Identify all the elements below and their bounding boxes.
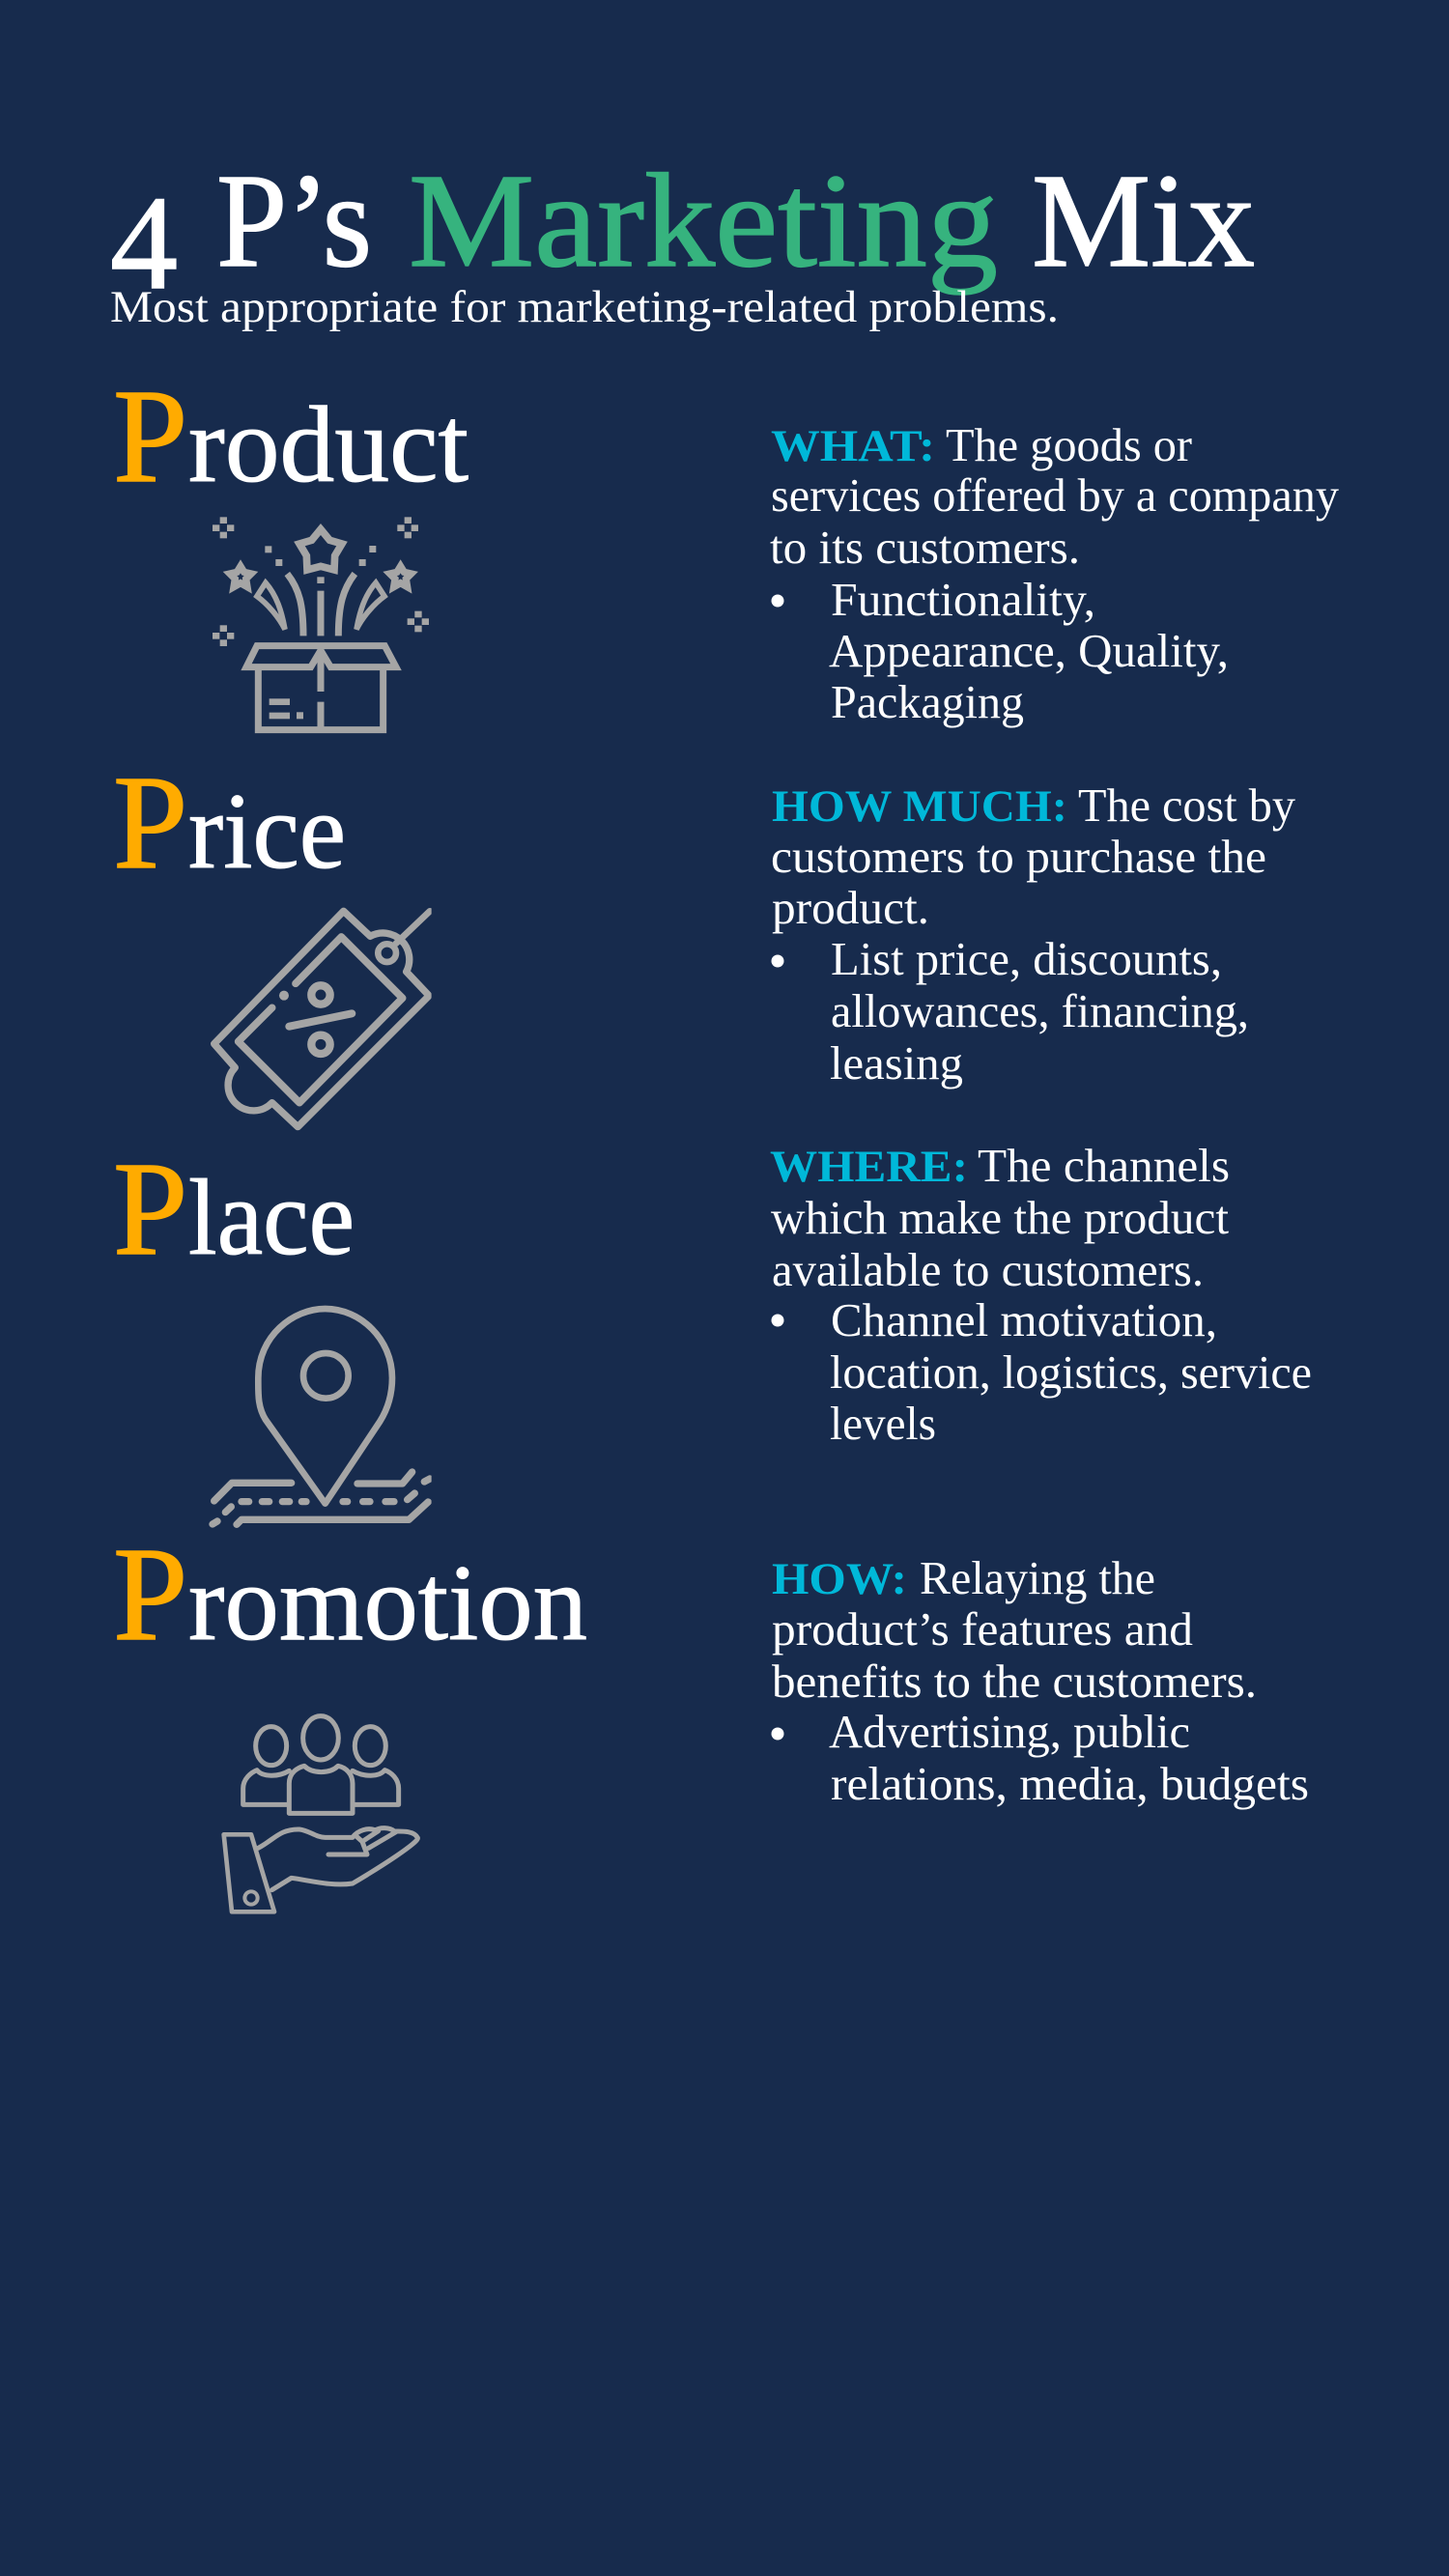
text block: what: Functionality, xyxy=(831,573,1095,626)
text block: how much: HOW MUCH: xyxy=(772,781,1067,832)
panel: price xyxy=(113,749,1295,1127)
heading: Place: P xyxy=(113,1135,187,1284)
text block: how xyxy=(771,1551,1309,1810)
text block: what: services offered by a company xyxy=(771,468,1339,522)
title: Marketing xyxy=(409,147,998,296)
icon: map pin on roads xyxy=(213,1309,430,1524)
text block: what: WHAT: xyxy=(771,421,935,471)
icon: price tag with percent xyxy=(214,911,430,1127)
title: 4 xyxy=(110,169,178,318)
text block: what: Packaging xyxy=(831,675,1024,728)
heading: Place xyxy=(113,1135,355,1284)
heading: Price: rice xyxy=(188,772,346,892)
text block: how much: List price, discounts, xyxy=(831,932,1222,985)
text block: how: product’s features and xyxy=(772,1602,1193,1656)
panel: promotion xyxy=(113,1520,1309,1911)
title: Mix xyxy=(1032,147,1255,296)
subtitle: Most appropriate for marketing-related problems. xyxy=(110,282,1059,332)
text block: what: The goods or xyxy=(946,418,1192,471)
text block: how much: customers to purchase the xyxy=(771,830,1266,883)
text block: what xyxy=(770,418,1339,728)
heading: Product: roduct xyxy=(188,385,469,505)
heading: Place: lace xyxy=(188,1158,355,1278)
text block: where: which make the product xyxy=(771,1191,1229,1244)
text block: how: HOW: xyxy=(772,1554,907,1604)
text block: how: benefits to the customers. xyxy=(772,1655,1257,1708)
text block: where: levels xyxy=(830,1397,936,1450)
heading: Price: P xyxy=(113,749,187,897)
heading: Price xyxy=(113,749,346,897)
title: P’s xyxy=(216,147,372,296)
icon: hand holding people xyxy=(224,1716,417,1911)
text block: how: Relaying the xyxy=(920,1551,1155,1604)
text block: where xyxy=(770,1139,1312,1450)
panel: place xyxy=(113,1135,1312,1524)
heading: Product xyxy=(113,362,469,511)
title xyxy=(110,147,1255,318)
text block: how much: leasing xyxy=(830,1036,963,1090)
text block: where: location, logistics, service xyxy=(830,1345,1312,1399)
text block: where: The channels xyxy=(978,1139,1230,1192)
heading: Product: P xyxy=(113,362,187,511)
text block: how much: product. xyxy=(772,881,929,934)
heading: Promotion: P xyxy=(113,1520,187,1669)
text block: what: Appearance, Quality, xyxy=(829,624,1229,677)
text block: how: Advertising, public xyxy=(829,1705,1190,1758)
text block: where: available to customers. xyxy=(772,1243,1204,1296)
text block: how much: The cost by xyxy=(1078,778,1295,832)
heading: Promotion xyxy=(113,1520,587,1669)
text block: where: WHERE: xyxy=(770,1142,968,1192)
text block: what: to its customers. xyxy=(770,521,1080,574)
text block: how: relations, media, budgets xyxy=(831,1757,1309,1810)
text block: where: Channel motivation, xyxy=(831,1293,1217,1346)
infographic canvas xyxy=(111,172,1339,1914)
heading: Promotion: romotion xyxy=(188,1543,587,1663)
text block: how much: allowances, financing, xyxy=(831,984,1249,1037)
text block: how much xyxy=(771,778,1295,1090)
panel: product xyxy=(113,362,1339,730)
icon: open box with stars xyxy=(213,517,429,730)
